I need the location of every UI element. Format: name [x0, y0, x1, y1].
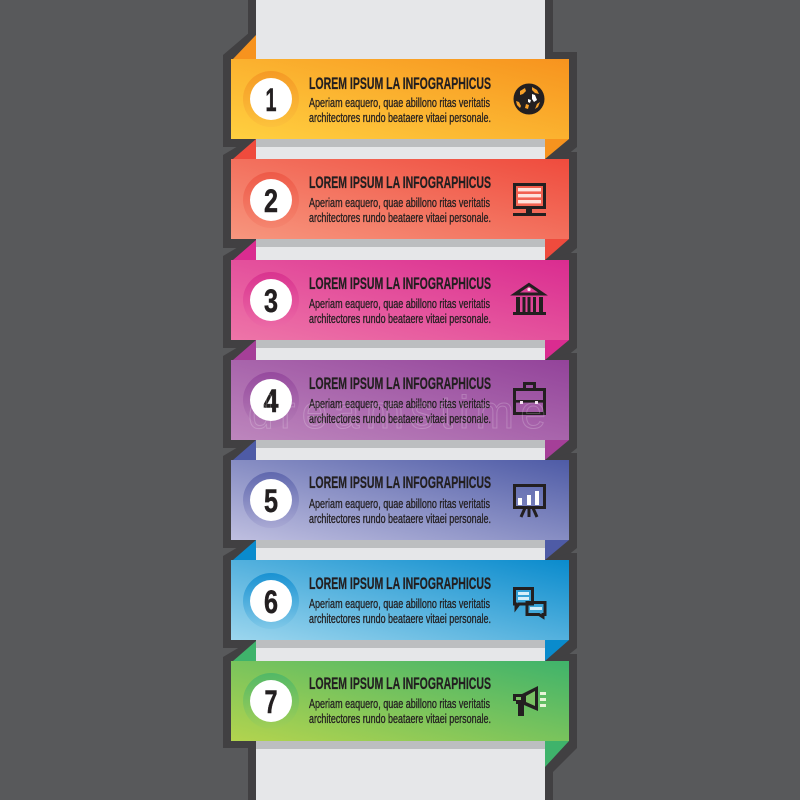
number badge 2 [243, 172, 299, 228]
panel: step 3 [223, 240, 577, 368]
heading 7: LOREM IPSUM LA INFOGRAPHICUS [309, 675, 491, 693]
number badge 4 [243, 372, 299, 428]
icon: briefcase [514, 384, 545, 414]
text block 6: Aperiam eaquero, quae abillono ritas veritatis [309, 597, 490, 611]
icon: globe [514, 84, 544, 114]
text block 1: architectores rundo beataere vitaei personale. [309, 111, 491, 125]
number badge 7 [243, 673, 299, 729]
heading 4: LOREM IPSUM LA INFOGRAPHICUS [309, 375, 491, 393]
text block 7: architectores rundo beataere vitaei personale. [309, 712, 491, 726]
number badge 6 [243, 573, 299, 629]
icon: bank [513, 284, 546, 315]
number badge 1 [243, 71, 299, 127]
panel: step 2 [223, 139, 577, 268]
central paper strip [248, 0, 553, 800]
icon: megaphone [513, 686, 546, 716]
number badge 1: 1 [266, 82, 276, 118]
text block 2: Aperiam eaquero, quae abillono ritas veritatis [309, 196, 490, 210]
panel: step 4 [223, 340, 577, 468]
number badge 7: 7 [264, 684, 278, 720]
text block 3: Aperiam eaquero, quae abillono ritas veritatis [309, 297, 490, 311]
text block 6: architectores rundo beataere vitaei personale. [309, 612, 491, 626]
number badge 6: 6 [264, 584, 278, 620]
watermark: dreamstime [248, 386, 546, 438]
icon: monitor [513, 184, 546, 216]
number badge 4: 4 [264, 383, 279, 419]
heading 2: LOREM IPSUM LA INFOGRAPHICUS [309, 174, 491, 192]
number badge 3: 3 [264, 283, 278, 319]
icon: presentation board [514, 486, 544, 517]
heading 3: LOREM IPSUM LA INFOGRAPHICUS [309, 275, 491, 293]
number badge 2: 2 [264, 183, 278, 219]
panel: step 7 [223, 641, 577, 800]
text block 4: architectores rundo beataere vitaei personale. [309, 412, 491, 426]
text block 3: architectores rundo beataere vitaei personale. [309, 312, 491, 326]
panel: step 6 [223, 540, 577, 668]
text block 1: Aperiam eaquero, quae abillono ritas veritatis [309, 96, 490, 110]
text block 7: Aperiam eaquero, quae abillono ritas veritatis [309, 697, 490, 711]
heading 6: LOREM IPSUM LA INFOGRAPHICUS [309, 575, 491, 593]
text block 4: Aperiam eaquero, quae abillono ritas veritatis [309, 397, 490, 411]
text block 2: architectores rundo beataere vitaei personale. [309, 211, 491, 225]
panel: step 1 [223, 32, 577, 167]
text block 5: Aperiam eaquero, quae abillono ritas veritatis [309, 497, 490, 511]
number badge 5: 5 [264, 483, 278, 519]
panel: step 5 [223, 440, 577, 568]
heading 5: LOREM IPSUM LA INFOGRAPHICUS [309, 474, 491, 492]
number badge 5 [243, 472, 299, 528]
icon: chat bubbles [514, 588, 545, 617]
text block 5: architectores rundo beataere vitaei personale. [309, 512, 491, 526]
number badge 3 [243, 272, 299, 328]
heading 1: LOREM IPSUM LA INFOGRAPHICUS [309, 75, 491, 93]
